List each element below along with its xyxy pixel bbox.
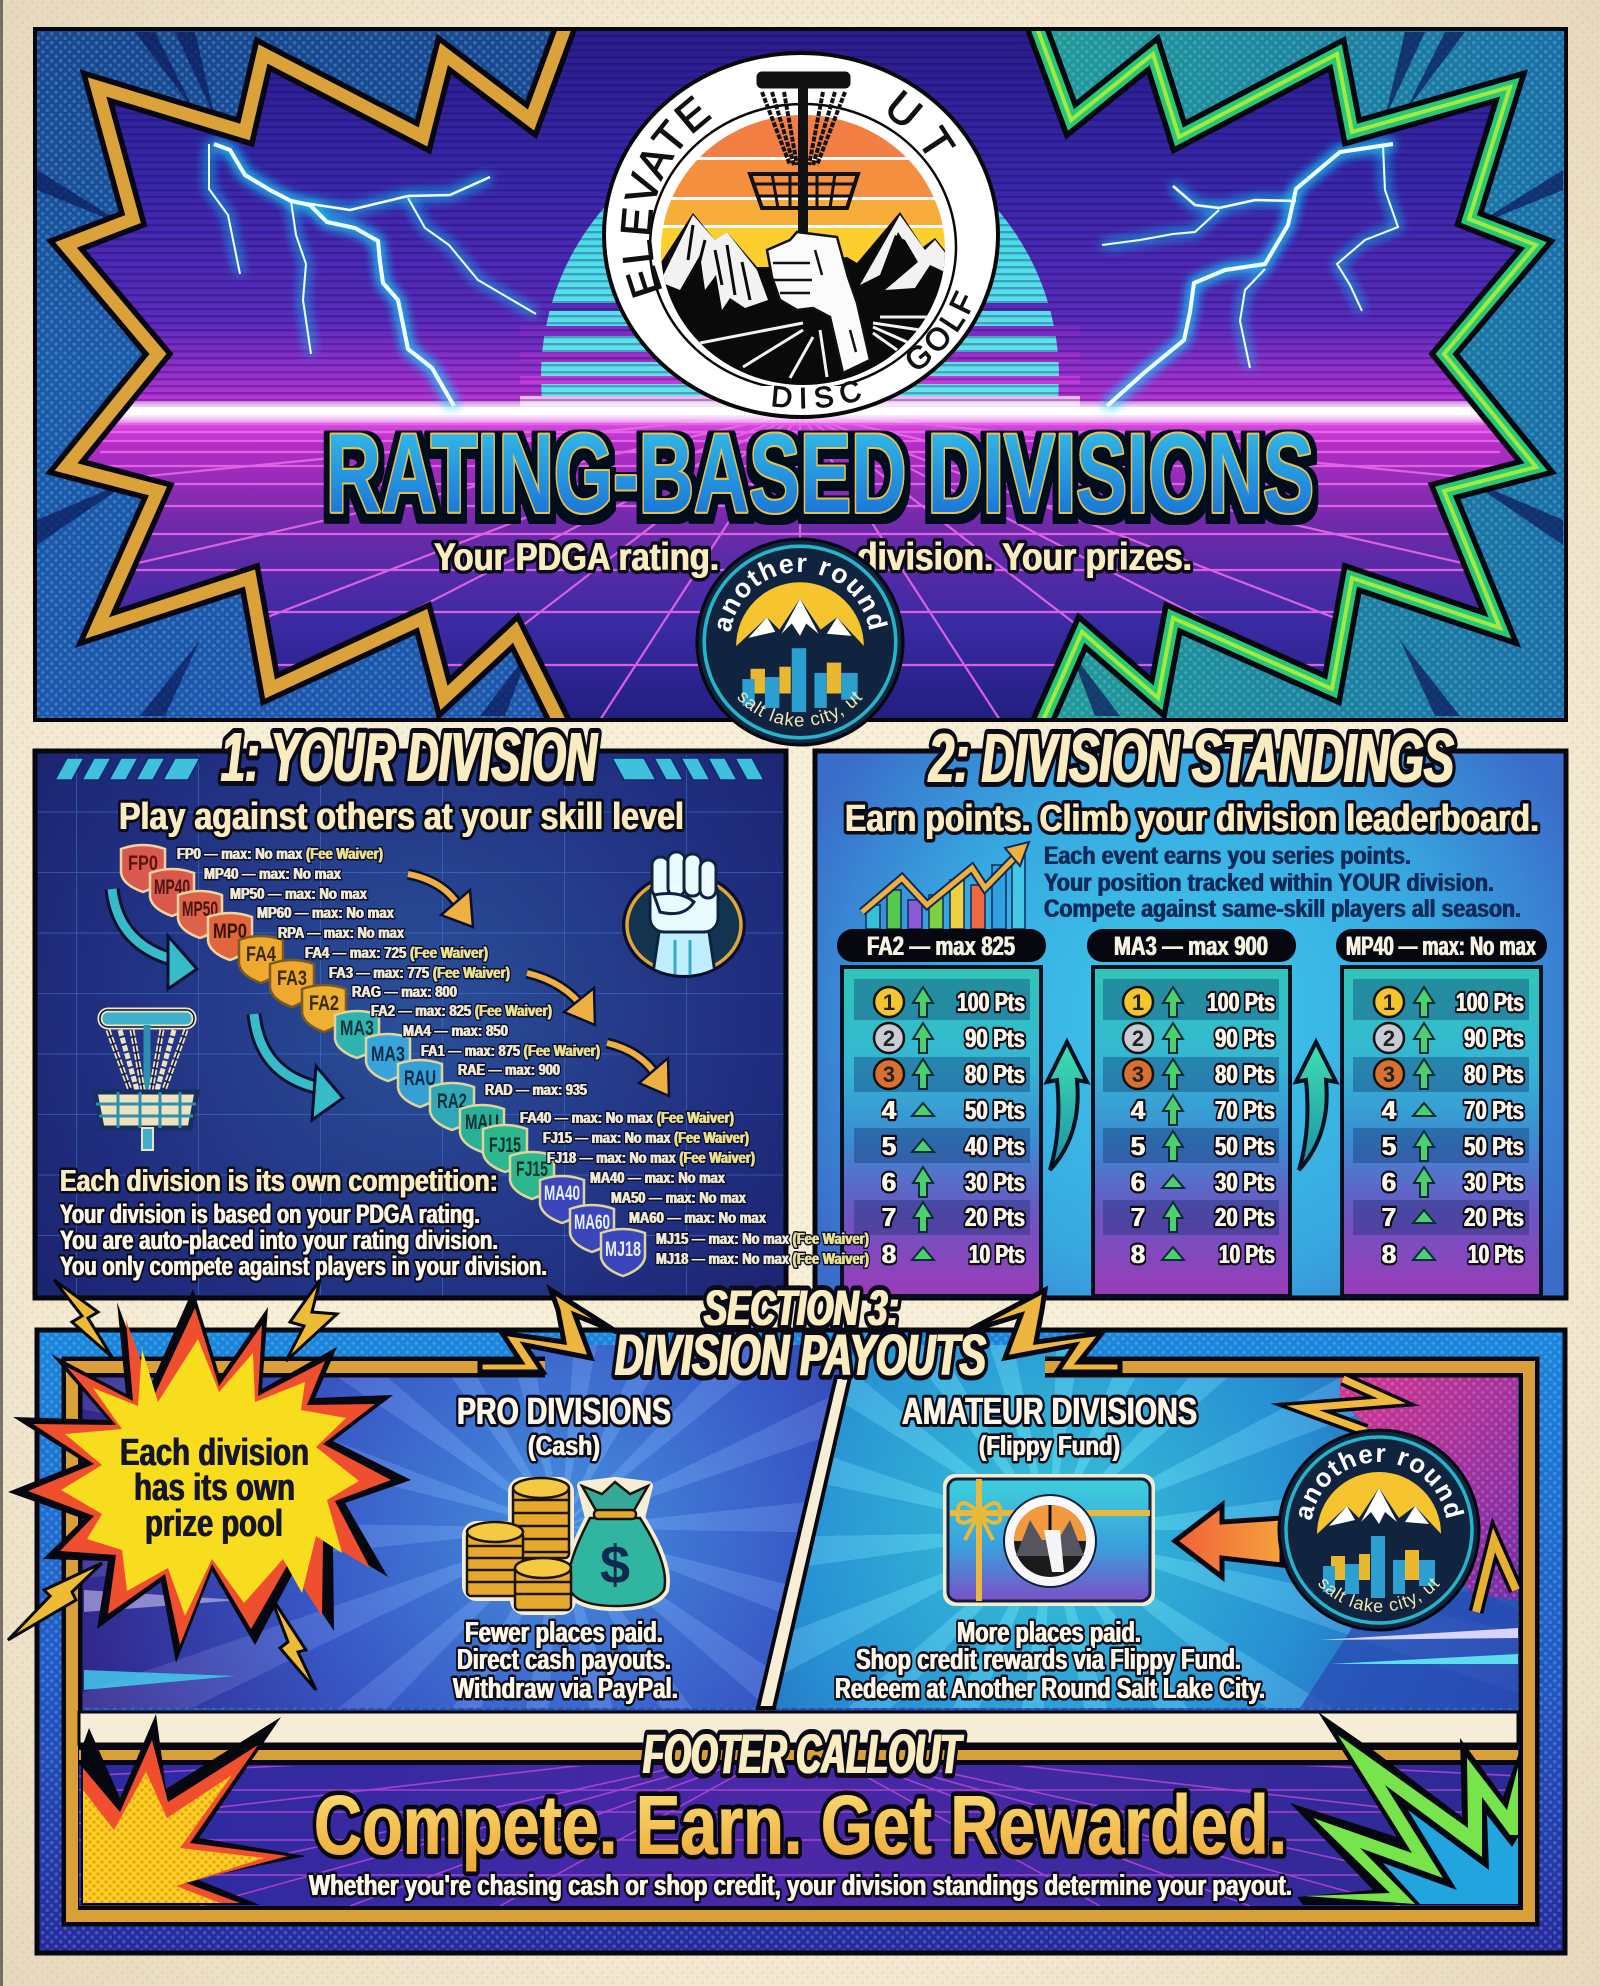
text block: series points xyxy=(1044,842,1521,923)
table: MP40: 4 xyxy=(1382,1095,1397,1125)
division list: MA60 — max: No max xyxy=(629,1210,766,1227)
table: FA2: 1 xyxy=(883,990,895,1015)
text: amateur notes: Shop credit rewards via Flippy Fund. xyxy=(856,1644,1241,1676)
division shields: FA3 xyxy=(277,967,307,990)
division shields: MP0 xyxy=(213,920,247,943)
arrow: badge to card xyxy=(1175,1505,1282,1577)
division list: MP60 — max: No max xyxy=(257,905,394,922)
subtitle: Your PDGA rating. xyxy=(434,536,719,579)
text: pro divisions heading xyxy=(457,1391,671,1461)
starburst callout: Each division xyxy=(120,1432,309,1474)
table: MP40: 8 xyxy=(1382,1239,1396,1269)
text: amateur divisions heading: (Flippy Fund) xyxy=(979,1430,1120,1461)
division list: MP50 — max: No max xyxy=(230,886,367,903)
table: MA3: 4 xyxy=(1131,1095,1146,1125)
division list: FJ15 — max: No max (Fee Waiver) xyxy=(543,1130,749,1147)
logo: Elevate UT Disc Golf: UT xyxy=(888,90,956,154)
division list: FA3 — max: 775 (Fee Waiver) xyxy=(329,965,510,982)
table: MA3: 7 xyxy=(1131,1202,1145,1232)
icon: raised fist xyxy=(625,852,743,980)
sub-panel: pro divisions background xyxy=(79,1340,869,1708)
division list: FA2 — max: 825 (Fee Waiver) xyxy=(371,1003,552,1020)
table: FA2: 100 Pts xyxy=(957,987,1025,1017)
badge: another round large: salt lake city, ut xyxy=(1318,1578,1440,1612)
division list: RAE — max: 900 xyxy=(458,1062,560,1079)
division shields: MA3 xyxy=(371,1043,405,1066)
text: amateur divisions heading xyxy=(902,1391,1197,1461)
table: FA2: 80 Pts xyxy=(965,1059,1025,1089)
icon: gift card xyxy=(943,1474,1155,1606)
table: FA2: 6 xyxy=(882,1167,896,1197)
division shields: MJ18 xyxy=(605,1238,641,1261)
icon: teal arrow 2 xyxy=(254,1014,343,1120)
sub-panel: amateur divisions background xyxy=(760,1340,1520,1708)
badge: another round hero: salt lake city, ut xyxy=(738,692,863,727)
badge: another round large: another round xyxy=(1299,1448,1464,1520)
table: MA3: 10 Pts xyxy=(1219,1239,1275,1269)
table: MP40: 80 Pts xyxy=(1464,1059,1524,1089)
table: MP40: 90 Pts xyxy=(1464,1023,1524,1053)
green burst outline xyxy=(1036,25,1536,725)
table: MP40: 7 xyxy=(1382,1202,1396,1232)
panel: section 3 division payouts xyxy=(7,1278,1568,1956)
division list: MJ15 — max: No max (Fee Waiver) xyxy=(656,1231,869,1248)
heading: section 3: DIVISION PAYOUTS xyxy=(615,1323,986,1388)
text: pro divisions heading: PRO DIVISIONS xyxy=(457,1391,671,1433)
heading: section 3: SECTION 3: xyxy=(704,1280,899,1336)
heading: footer callout: FOOTER CALLOUT xyxy=(643,1722,964,1785)
division shields: RA2 xyxy=(437,1090,467,1113)
starburst callout: prize pool xyxy=(145,1503,283,1545)
table: MP40: 1 xyxy=(1383,990,1395,1015)
division list: FJ18 — max: No max (Fee Waiver) xyxy=(547,1150,755,1167)
subtitle: division. Your prizes. xyxy=(857,536,1192,579)
table: FA2: 3 xyxy=(883,1062,895,1087)
text block: series points: Compete against same-skill players all season. xyxy=(1044,895,1521,923)
icon: gold arrow 1 xyxy=(408,874,473,927)
division shields: MA60 xyxy=(574,1211,610,1234)
table: MA3: 6 xyxy=(1131,1167,1145,1197)
table: FA2: 30 Pts xyxy=(965,1167,1025,1197)
decorative header stripes left xyxy=(55,758,764,780)
pill: FA2: FA2 — max 825 xyxy=(867,931,1015,961)
division shields: RAU xyxy=(404,1067,436,1090)
table: FA2: 40 Pts xyxy=(965,1131,1025,1161)
division shields xyxy=(121,845,645,1276)
table: MA3: 3 xyxy=(1132,1062,1144,1087)
lightning ornament right edge xyxy=(1476,1540,1516,1612)
division list: RAG — max: 800 xyxy=(352,984,457,1001)
icon: coins and money bag xyxy=(467,1478,665,1610)
table: MA3: 90 Pts xyxy=(1215,1023,1275,1053)
table: MP40: 6 xyxy=(1382,1167,1396,1197)
division list: MA50 — max: No max xyxy=(611,1190,746,1207)
text: pro notes xyxy=(453,1617,678,1705)
icon: gold arrow 3 xyxy=(607,1043,669,1096)
table: MP40: 3 xyxy=(1383,1062,1395,1087)
arrow: climb 1 xyxy=(1047,1042,1087,1170)
text block: each division xyxy=(60,1163,547,1281)
subheading: Play against others at your skill level xyxy=(119,796,684,838)
divider xyxy=(758,1377,850,1708)
division list: RAD — max: 935 xyxy=(485,1082,587,1099)
footer panel xyxy=(79,1746,1518,1906)
table: FA2: 4 xyxy=(882,1095,897,1125)
table: FA2 xyxy=(837,929,1046,1296)
text: amateur notes: Redeem at Another Round Salt Lake City. xyxy=(835,1673,1265,1705)
logo: Elevate UT Disc Golf: GOLF xyxy=(906,290,971,369)
burst: footer right xyxy=(1290,1712,1520,1905)
icon: coins and money bag: $ xyxy=(600,1535,630,1595)
table: MA3: 80 Pts xyxy=(1215,1059,1275,1089)
division list: FP0 — max: No max (Fee Waiver) xyxy=(177,846,383,863)
mini logo on card xyxy=(1004,1495,1096,1587)
division shields: MP40 xyxy=(154,876,190,899)
burst: footer left xyxy=(81,1714,306,1905)
text block: each division: Your division is based on your PDGA rating. xyxy=(60,1199,480,1229)
table: MA3: 30 Pts xyxy=(1215,1167,1275,1197)
icon: disc golf basket xyxy=(95,1010,197,1150)
lightning left xyxy=(209,144,536,406)
lightning ornament in magenta corner xyxy=(1303,1379,1392,1431)
table: MA3: 1 xyxy=(1132,990,1144,1015)
subtitle xyxy=(434,536,1192,579)
footer subtext: Whether you're chasing cash or shop credit, your division standings determine your payout. xyxy=(309,1870,1292,1902)
starburst callout xyxy=(8,1280,411,1690)
division shields: MAU xyxy=(465,1111,499,1134)
gold frame xyxy=(72,1367,1529,1916)
table: MP40 xyxy=(1336,929,1547,1296)
division list: FA40 — max: No max (Fee Waiver) xyxy=(520,1110,734,1127)
table: FA2: 7 xyxy=(882,1202,896,1232)
title bolt right xyxy=(966,1290,1120,1372)
table: FA2: 20 Pts xyxy=(965,1202,1025,1232)
table: MP40: 70 Pts xyxy=(1464,1095,1524,1125)
table: MP40: 10 Pts xyxy=(1468,1239,1524,1269)
table: FA2: 50 Pts xyxy=(965,1095,1025,1125)
retro sun xyxy=(520,208,1080,407)
table: FA2: 10 Pts xyxy=(969,1239,1025,1269)
table: MP40: 50 Pts xyxy=(1464,1131,1524,1161)
division shields: FP0 xyxy=(128,852,158,875)
badge: another round large xyxy=(1278,1428,1480,1632)
division shields: FA4 xyxy=(246,943,276,966)
heading: section 3 xyxy=(615,1280,986,1388)
table: MP40: 2 xyxy=(1383,1026,1395,1051)
text block: series points: Your position tracked within YOUR division. xyxy=(1044,869,1494,897)
title bolt left xyxy=(480,1290,617,1372)
text: pro divisions heading: (Cash) xyxy=(528,1430,600,1461)
table: MP40: 30 Pts xyxy=(1464,1167,1524,1197)
table: MP40: 20 Pts xyxy=(1464,1202,1524,1232)
division shields: FJ15 xyxy=(516,1158,548,1181)
fist in logo xyxy=(767,232,870,373)
table: FA2: 8 xyxy=(882,1239,896,1269)
synthwave sky and grid xyxy=(86,31,1516,718)
table: MA3: 70 Pts xyxy=(1215,1095,1275,1125)
table: MP40: 100 Pts xyxy=(1456,987,1524,1017)
heading: 1 your division: 1: YOUR DIVISION xyxy=(221,718,598,796)
table: MA3: 5 xyxy=(1131,1131,1145,1161)
text: amateur divisions heading: AMATEUR DIVISIONS xyxy=(902,1391,1197,1433)
logo: Elevate UT Disc Golf: ELEVATE xyxy=(620,95,712,298)
panel: 2 division standings xyxy=(815,719,1566,1298)
division shields: MA40 xyxy=(544,1182,580,1205)
starburst callout: has its own xyxy=(134,1467,295,1509)
text block: each division: You only compete against players in your division. xyxy=(60,1251,547,1281)
table: MA3: 20 Pts xyxy=(1215,1202,1275,1232)
division shields: FJ15 xyxy=(489,1134,521,1157)
icon: teal arrow 1 xyxy=(112,889,197,989)
icon: rising chart xyxy=(862,842,1029,929)
text block: series points: Each event earns you series points. xyxy=(1044,842,1411,870)
disc golf basket in logo xyxy=(750,72,858,240)
arrow: climb 2 xyxy=(1296,1042,1336,1170)
table: MP40: 5 xyxy=(1382,1131,1396,1161)
table: FA2: 2 xyxy=(883,1026,895,1051)
badge: another round hero xyxy=(695,538,905,746)
icon: gold arrow 2 xyxy=(527,973,595,1025)
text: amateur notes xyxy=(835,1617,1265,1705)
division list: MA40 — max: No max xyxy=(590,1170,725,1187)
table: MA3: 8 xyxy=(1131,1239,1145,1269)
table: MA3: 100 Pts xyxy=(1207,987,1275,1017)
text block: each division: You are auto-placed into your rating division. xyxy=(60,1225,498,1255)
footer headline: Compete. Earn. Get Rewarded. xyxy=(314,1778,1287,1872)
table: FA2: 90 Pts xyxy=(965,1023,1025,1053)
table: FA2: 5 xyxy=(882,1131,896,1161)
division list: RPA — max: No max xyxy=(278,925,404,942)
pill: MA3: MA3 — max 900 xyxy=(1114,931,1268,961)
text block: each division: Each division is its own competition: xyxy=(60,1163,498,1198)
logo: Elevate UT Disc Golf: DISC xyxy=(772,381,861,409)
small bolts around starburst xyxy=(8,1280,337,1690)
division list: MJ18 — max: No max (Fee Waiver) xyxy=(656,1251,869,1268)
cream band xyxy=(79,1712,1518,1744)
text: pro notes: Direct cash payouts. xyxy=(457,1644,671,1676)
table: MA3: 50 Pts xyxy=(1215,1131,1275,1161)
division shields: MP50 xyxy=(182,898,218,921)
horizon glow xyxy=(110,403,1490,421)
logo: Elevate UT Disc Golf xyxy=(602,51,1000,419)
text: amateur notes: More places paid. xyxy=(957,1617,1141,1649)
table: MA3: 2 xyxy=(1132,1026,1144,1051)
division list xyxy=(177,846,869,1268)
badge: another round hero: another round xyxy=(718,558,888,632)
division list: MA4 — max: 850 xyxy=(403,1023,508,1040)
division shields: MA3 xyxy=(340,1017,374,1040)
division shields: FA2 xyxy=(309,992,339,1015)
division list: FA1 — max: 875 (Fee Waiver) xyxy=(421,1043,600,1060)
table: MA3 xyxy=(1087,929,1296,1296)
division list: MP40 — max: No max xyxy=(204,866,341,883)
panel: 1 your division xyxy=(35,718,869,1298)
lightning right xyxy=(1102,144,1398,406)
division list: FA4 — max: 725 (Fee Waiver) xyxy=(305,945,488,962)
text: pro notes: Withdraw via PayPal. xyxy=(453,1673,678,1705)
gold burst outline xyxy=(66,25,566,725)
text: pro notes: Fewer places paid. xyxy=(465,1617,663,1649)
